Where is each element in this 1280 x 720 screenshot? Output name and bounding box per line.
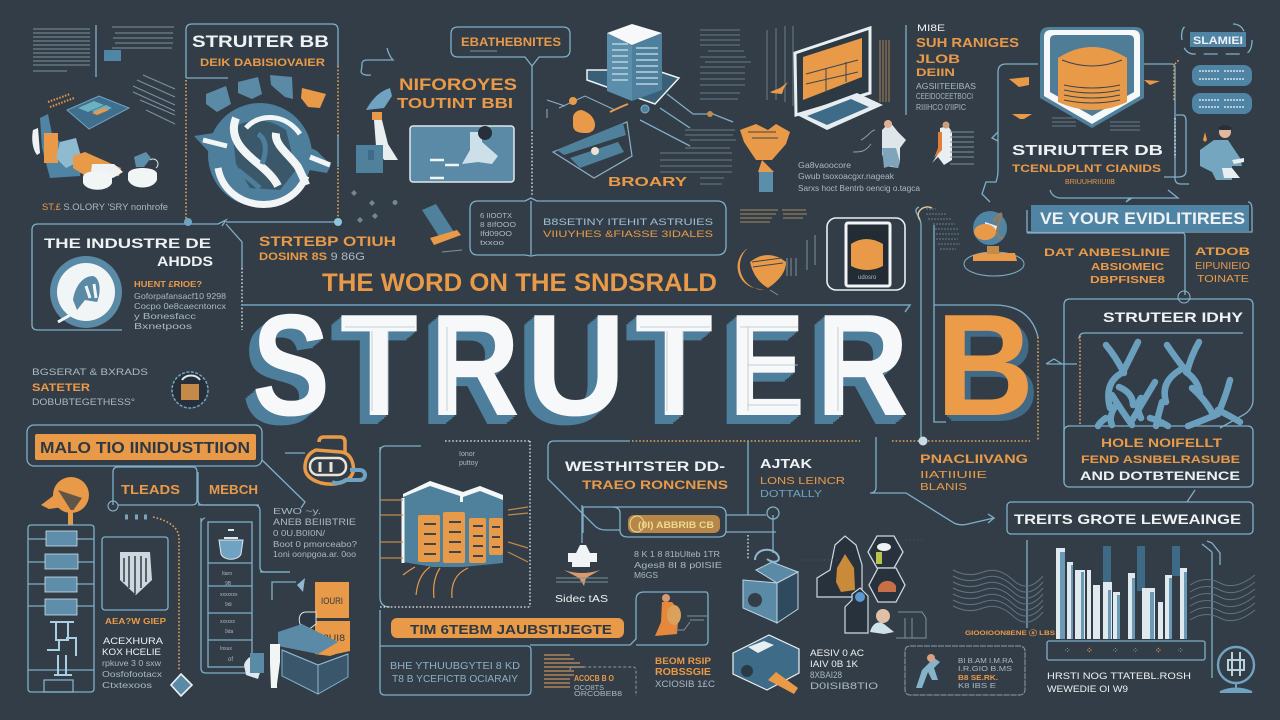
connector and text: Ewo: 0 0U.B0I0N/ [273, 528, 326, 538]
icon: orange bulb [738, 235, 815, 295]
text block: funnel caption: Sarxs hoct Bentrb oencig o.tagca [798, 184, 921, 193]
text block: panel copy: Cocpo 0e8caecntoncx [134, 301, 227, 311]
text block: Stiriutter DB [1012, 142, 1163, 186]
card: tablet with figure [410, 126, 514, 182]
main title: Struter B [252, 284, 1034, 446]
main title: Struter B: T [635, 284, 713, 446]
text block: Sun ranges [906, 23, 1019, 115]
panel: Malo Tio Iinidusttiion banner [27, 425, 262, 466]
text block: Dat anbesline: DAT ANBESLINIE [1044, 247, 1170, 259]
orange bar: Tim 6tebm [391, 618, 624, 638]
device: isometric console [553, 122, 632, 178]
main title: Struter B: B [936, 284, 1034, 446]
icon: orange funnel [740, 124, 790, 192]
icon: orange badge [41, 477, 89, 525]
card: person with notes: I.R.GIO B.MS [958, 666, 1012, 673]
orange bar: Tim 6tebm: TIM 6TEBM JAUBSTIJEGTE [410, 622, 612, 637]
left text: Satetter: BGSERAT & BXRADS [32, 367, 148, 377]
text: panel lines: HOLE NOIFELLT [1101, 438, 1222, 450]
panel: Basetiny box: txxoo [480, 240, 504, 247]
text block: Stiriutter DB: TCENLDPLNT CIANIDS [1012, 163, 1161, 175]
text: Ajtak: AJTAK [760, 457, 812, 471]
box: Traits Grote Levveainge: TREITS GROTE LEWEAINGE [1014, 512, 1241, 527]
text block: Dat anbesline: ABSIOMEIC [1091, 261, 1164, 273]
icon: orange DB logo [285, 437, 365, 484]
text block: funnel caption: Gwub tsoxoacgxr.nageak [798, 172, 895, 181]
heading: WESTHITSTER DD- [565, 459, 725, 474]
box: Ebathebnites [451, 27, 570, 196]
text block: Beom Rsip [655, 656, 716, 689]
icon: keyboard [422, 204, 462, 252]
main title: Struter B: U [526, 284, 626, 446]
text block: left lower: KOX HCELIE [102, 647, 161, 657]
panel: stacked table: xxxxxx [220, 619, 236, 625]
panel: Westhitster DD [548, 441, 860, 559]
text block: Dat anbesline: ATDOB [1195, 246, 1250, 258]
text block: left lower: Ctxtexoos [102, 680, 152, 690]
connector and text: Ewo: ANEB BEIIBTRIE [273, 517, 356, 527]
text block: funnel caption [798, 161, 921, 193]
heading: Niforoyes: NIFOROYES [399, 75, 517, 94]
text block: bottom centre: ACOCB B O [574, 674, 614, 683]
heading: Niforoyes: TOUTINT BBI [397, 95, 513, 112]
tabs: Tleads and Mebch: MEBCH [209, 483, 258, 497]
icon: microphone [1218, 647, 1254, 692]
text block: Restv: 8XBAI28 [810, 670, 842, 680]
text block: Beom Rsip: BEOM RSIP [655, 656, 711, 666]
text block: bottom centre [544, 655, 636, 698]
text block: Pnacliivang: IIATIIUIIE [920, 470, 988, 481]
top-left illustration: worker at tablet [32, 25, 175, 212]
panel: Struiter BB logo [186, 24, 338, 220]
icon: server building [380, 481, 528, 598]
main title: Struter B: E [729, 284, 805, 446]
panel: lower caption [380, 592, 708, 695]
text block: Dat anbesline: DBPFISNE8 [1090, 274, 1165, 286]
heading: Strtebp Otiuh: DOSINR 8S 9 86G [259, 251, 365, 263]
icon: circular portrait [50, 256, 122, 328]
wave lines [953, 570, 1255, 622]
left text: Satetter [32, 367, 148, 408]
panel: Struteer IDHY: FEND ASNBELRASUBE [1081, 454, 1240, 466]
text block: Pnacliivang: BLANIS [920, 482, 967, 493]
text block: Restv [810, 648, 878, 691]
text block: Sun ranges: MI8E [917, 23, 945, 33]
panel: server building [380, 441, 530, 607]
label: Broary: BROARY [608, 174, 687, 189]
panel: stacked table: Itaro [222, 571, 232, 577]
icon: blue X shapes [1098, 342, 1240, 426]
text block: bottom centre: OCO8TS [574, 685, 604, 692]
figures in the upper middle [853, 120, 974, 168]
panel: Basetiny box: VIIUYHES &FIASSE 3IDALES [543, 229, 713, 240]
chart: bars [965, 540, 1220, 694]
chart: bars: ⁘ [1064, 646, 1071, 655]
text block: Beom Rsip: XCIOSIB 1£C [655, 679, 716, 689]
panel: stacked table: xxxxxxx [220, 592, 238, 598]
text block: Dat anbesline [1027, 233, 1250, 303]
heading: Niforoyes [397, 75, 517, 112]
chart: bars: ⁘ [1086, 646, 1093, 655]
text block: Sun ranges: JLOB [916, 52, 960, 66]
connector arrow to traits box [870, 437, 994, 525]
axis note: GIOOIOON8ENE ⓐ LBS [965, 628, 1056, 637]
illustration: figure with bird [356, 88, 398, 173]
tabs: Tleads and Mebch [108, 467, 259, 511]
heading: The Industre De: THE INDUSTRE DE [44, 236, 211, 251]
box: Traits Grote Levveainge [1007, 502, 1253, 534]
heading: Ahdds: AHDDS [157, 254, 213, 269]
heading: The word on the sndsrald: THE WORD ON THE SNDSRALD [322, 269, 717, 297]
panel: Westhitster DD: DOTTALLY [760, 488, 822, 500]
icon: card with orange cylinder [827, 218, 905, 290]
text block: centre: 8 K 1 8 81bUlteb 1TR [634, 549, 720, 559]
text block: Pnacliivang [920, 452, 1028, 493]
pill: database badge [628, 515, 720, 533]
chart caption: HRSTI NOG TTATEBL.ROSH [1047, 671, 1191, 681]
text block: Pnacliivang: PNACLIIVANG [920, 452, 1028, 466]
text block: Dat anbesline: TOINATE [1197, 274, 1249, 285]
text block: Stiriutter DB: BRIUUHRIIUIIB [1065, 177, 1115, 186]
heading: Struiter BB: STRUITER BB [192, 32, 329, 51]
main title: Struter B: S [252, 284, 330, 446]
main title: Struter B: R [816, 284, 909, 446]
caption: top-left illustration: ST.£ S.OLORY 'SRY nonhrofe [42, 202, 168, 212]
connector and text: Ewo: EWO ~y. [273, 506, 321, 516]
banner: Ve your evidlitirees: VE YOUR EVIDLITIREES [1040, 210, 1245, 228]
text block: left lower: ACEXHURA [103, 636, 163, 646]
main title: Struter B: T [340, 284, 418, 446]
pill: database badge: (0I) ABBRIB CB [638, 520, 715, 530]
text block: bottom centre: ORCOBEB8 [574, 691, 622, 698]
panel: Westhitster DD: LONS LEINCR [760, 475, 845, 487]
text block: Sun ranges: RIIIHCO 0'IIPIC [916, 103, 966, 112]
text block: funnel caption: Ga8vaoocore [798, 161, 852, 170]
panel: ladder diagram [28, 525, 94, 692]
icon: cube with hook [743, 507, 798, 623]
caption: shield: AEA?W GIEP [105, 617, 167, 626]
illustration: engineer at desk: IOURI [321, 596, 343, 606]
connector and text: Ewo [262, 460, 357, 559]
text block: left lower: Oosfofootacx [102, 669, 163, 679]
small connector over Niforoyes [361, 48, 393, 75]
chart: bars: ⁘ [1155, 646, 1162, 655]
text block: panel copy [134, 279, 227, 331]
icon: intertwined S logo [194, 103, 331, 207]
text block: centre: M6GS [634, 570, 658, 580]
text block: Sun ranges: CEEIDOCEETBOCI [916, 92, 973, 101]
card: person with notes: K8 IBS E [958, 683, 996, 690]
text block: Sun ranges: AGSIITEEIBAS [916, 82, 976, 91]
text block: Stiriutter DB: STIRIUTTER DB [1012, 142, 1163, 159]
icon: white robot [555, 505, 608, 605]
panel: The Industre De Ahdds [32, 218, 342, 331]
box: Ebathebnites: EBATHEBNITES [461, 35, 561, 49]
panel: stacked table: of [228, 657, 233, 663]
chart: bars: ⁘ [1112, 646, 1119, 655]
caption: robot: Sidec tAS [555, 594, 608, 605]
connector and text: Ewo: 1oni oonpgoa.ar. 0oo [273, 550, 357, 559]
panel: stacked table: Insux [220, 646, 232, 652]
panel: stacked table: 9di [225, 602, 232, 608]
card: person with notes [905, 646, 1025, 695]
panel: lower caption: BHE YTHUUBGYTEI 8 KD [390, 661, 520, 672]
panel: Struteer IDHY: AND DOTBTENENCE [1080, 469, 1240, 483]
main title: Struter B: R [430, 284, 520, 446]
banner: Ve your evidlitirees [1027, 202, 1252, 232]
heading: Strtebp Otiuh: STRTEBP OTIUH [259, 234, 396, 249]
text block: centre [634, 549, 722, 580]
connector and text: Ewo: Boot 0 pmorceabo? [273, 539, 357, 549]
sparkle cluster [351, 190, 398, 223]
figure: seated on oval [964, 211, 1024, 276]
server tower on platform [587, 24, 679, 104]
illustration: engineer at desk [244, 572, 350, 694]
text block: panel copy: Bxnetpoos [134, 321, 192, 331]
chart: bars: ⁘ [1177, 646, 1184, 655]
panel: Struteer IDHY [1046, 299, 1253, 502]
panel: stacked table: 9da [225, 629, 234, 635]
panel: Basetiny box [470, 198, 726, 256]
heading: STRUTEER IDHY [1103, 309, 1244, 325]
text: small caption: Ionor [459, 451, 476, 458]
text block: panel copy: y Bonesfacc [134, 311, 197, 321]
panel: stacked table: 9B [225, 581, 232, 587]
chart: bars: WEWEDIE OI W9 [1047, 684, 1128, 694]
card: person with notes: B8 SE.RK. [958, 673, 998, 682]
left text: Satetter: DOBUBTEGETHESS° [32, 397, 135, 408]
text block: Sun ranges: SUH RANIGES [916, 35, 1019, 50]
icon: gear lock [172, 372, 208, 408]
tabs: Tleads and Mebch: TLEADS [121, 483, 180, 497]
illustration: engineer at desk: 3UI8 [323, 633, 345, 643]
text block: panel copy: Goforpafansacf10 9298 [134, 291, 226, 301]
text block: left lower [102, 636, 163, 690]
dotted connector with gem [125, 517, 192, 696]
chart axis box [1047, 641, 1205, 660]
text block: panel copy: HUENT £RIOE? [134, 279, 202, 289]
panel: Basetiny box: 8 8IfOOO [480, 222, 517, 229]
badge: database shield with connectors [982, 27, 1189, 202]
hex people cluster [800, 536, 926, 638]
connector nodes and orange icon [547, 94, 733, 146]
panel: stacked table [198, 505, 290, 673]
figure: presenter [1200, 125, 1244, 180]
subheading: TRAEO RONCNENS [582, 478, 728, 492]
card: shield [102, 537, 168, 626]
text block: centre: Ages8 8I 8 p0ISIE [634, 560, 722, 570]
icon: card with orange cylinder: udosro [858, 275, 877, 281]
card: person with notes: BI B.AM I.M.RA [958, 658, 1013, 665]
card: orange figure [655, 594, 707, 636]
pills: right column [1164, 24, 1252, 177]
chart: bars: ⁘ [1132, 646, 1139, 655]
text block: Restv: D0ISIB8TIO [810, 681, 878, 691]
text block: Restv: IAIV 0B 1K [810, 659, 858, 669]
panel: server building: puttoy [459, 460, 479, 467]
decorative lines: mid [740, 210, 807, 222]
text block: Restv: AESIV 0 AC [810, 648, 865, 658]
text block: Sun ranges: DEIIN [916, 67, 955, 79]
panel: Basetiny box: Ifd09OO [480, 231, 513, 238]
panel: Basetiny box: 6 IIOOTX [480, 213, 512, 220]
icon: pot [219, 540, 243, 559]
panel: Basetiny box: B8SETINY ITEHIT ASTRUIES [543, 217, 713, 228]
text block: Dat anbesline: EIPUNIEIO [1195, 261, 1250, 272]
panel: Malo Tio Iinidusttiion banner: MALO TIO IINIDUSTTIION [40, 440, 250, 457]
text block: left lower: rpkuve 3 0 sxw [102, 658, 162, 668]
panel: lower caption: T8 B YCEFICTB OCIARAIY [392, 674, 518, 685]
heading: Strtebp Otiuh [259, 234, 396, 263]
subheading: Dek Dabisiovaier: DEIK DABISIOVAIER [200, 57, 325, 69]
icon: four cups [206, 75, 326, 112]
rule under heading [241, 305, 910, 312]
pills: right column: SLAMIEI [1193, 35, 1243, 47]
text lines near tower [660, 30, 751, 184]
icon: isometric device [733, 635, 799, 694]
icon: monitor [767, 26, 889, 130]
frame around letter B [892, 207, 1038, 446]
dotted notes near line [918, 207, 960, 249]
text block: Beom Rsip: ROBSSGIE [655, 667, 711, 678]
left text: Satetter: SATETER [32, 382, 90, 394]
